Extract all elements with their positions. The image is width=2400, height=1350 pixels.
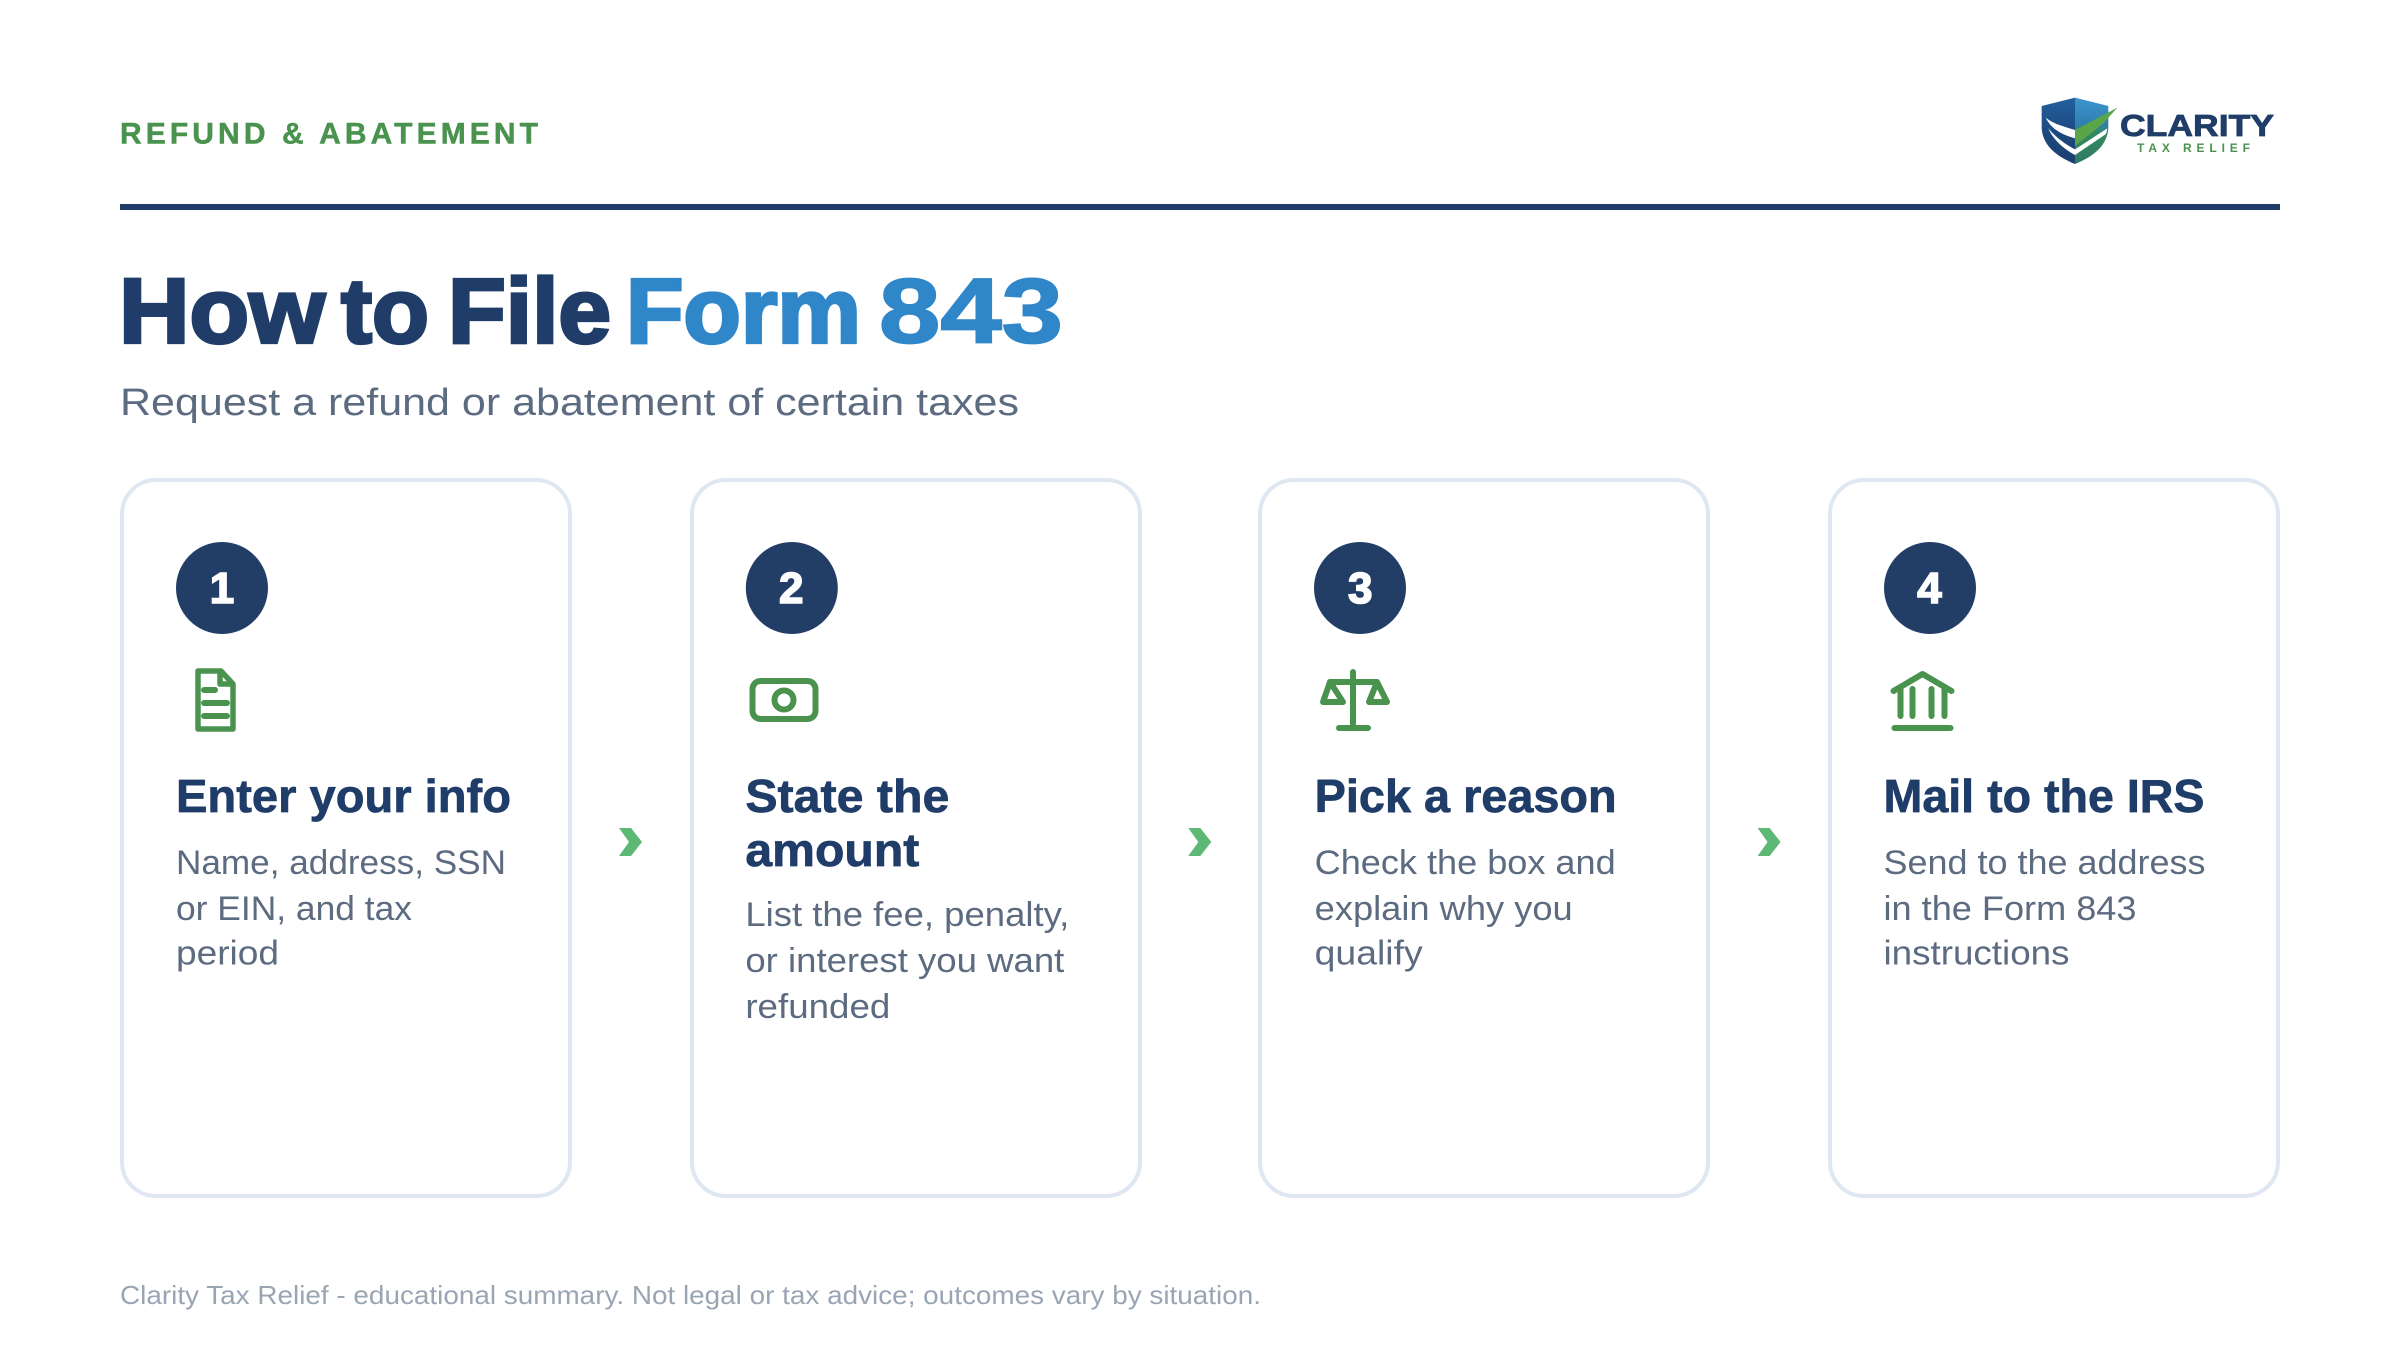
description [1315, 844, 1616, 972]
footer disclaimer: Clarity Tax Relief - educational summary. Not legal or tax advice; outcomes vary by situation. [120, 1280, 1261, 1310]
description: in the Form 843 [1884, 890, 2136, 928]
description: explain why you [1315, 890, 1573, 928]
heading: Pick a reason [1315, 770, 1617, 822]
icon: scales [1323, 672, 1387, 728]
step number 4 [1884, 542, 1976, 634]
description: or EIN, and tax [176, 890, 412, 928]
arrow 1 [619, 828, 642, 856]
heading: State the [745, 770, 949, 822]
description: Check the box and [1315, 844, 1616, 882]
step number 3: 3 [1348, 564, 1372, 613]
heading: Mail to the IRS [1884, 770, 2204, 822]
arrow 3 [1758, 828, 1781, 856]
step number 1: 1 [210, 564, 234, 613]
description: Name, address, SSN [176, 844, 506, 882]
panel: step 2 [692, 480, 1140, 1196]
icon: shield with check [2042, 98, 2117, 164]
description: or interest you want [745, 942, 1065, 980]
logo wordmark: CLARITY [2120, 108, 2274, 143]
description: refunded [745, 988, 890, 1026]
subtitle: Request a refund or abatement of certain taxes [120, 382, 1019, 424]
description: period [176, 934, 279, 972]
description: instructions [1884, 934, 2070, 972]
heading: amount [745, 824, 919, 876]
title: How [119, 260, 325, 362]
panel: step 4 [1830, 480, 2278, 1196]
eyebrow label: REFUND & ABATEMENT [120, 118, 538, 150]
icon: bank building [1894, 674, 1952, 728]
heading [745, 770, 949, 876]
logo tagline: TAX RELIEF [2137, 141, 2250, 155]
step number 3 [1314, 542, 1406, 634]
panel: step 3 [1260, 480, 1708, 1196]
heading: Enter your info [176, 770, 511, 822]
step number 2 [746, 542, 838, 634]
description: qualify [1315, 934, 1423, 972]
title: 843 [879, 260, 1063, 362]
panel: step 1 [122, 480, 570, 1196]
description [176, 844, 506, 972]
header rule [120, 204, 2280, 210]
title: File [448, 260, 611, 362]
arrow 2 [1188, 828, 1211, 856]
logo: Clarity Tax Relief [2042, 98, 2274, 164]
step number 2: 2 [779, 564, 804, 613]
description: Send to the address [1884, 844, 2206, 882]
icon: document [198, 671, 233, 729]
step number 4: 4 [1917, 564, 1942, 613]
title: Form [626, 260, 861, 362]
description: List the fee, penalty, [745, 896, 1069, 934]
description [745, 896, 1069, 1026]
title: to [341, 260, 429, 362]
step number 1 [176, 542, 268, 634]
title [119, 260, 1063, 362]
icon: banknote [752, 681, 816, 719]
description [1884, 844, 2206, 972]
